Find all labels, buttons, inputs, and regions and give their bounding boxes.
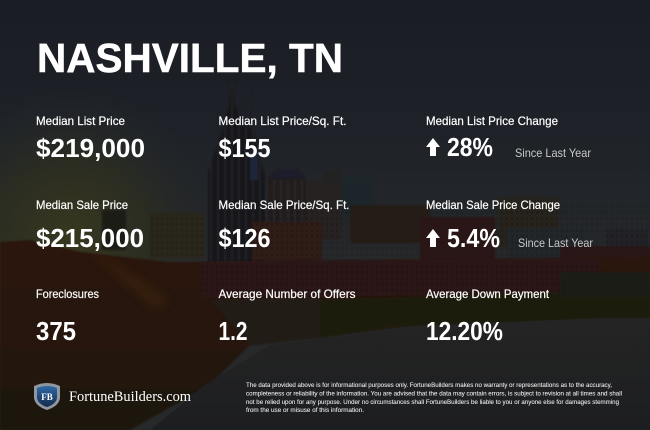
stat: median sale price per sq ft: Median Sale Price/Sq. Ft. (218, 198, 350, 212)
stat: median sale price per sq ft: $126 (218, 223, 270, 253)
disclaimer: not be relied upon for any purpose. Under no circumstances shall FortuneBuilders be liable to you or anyone else for damages stemming (246, 400, 619, 406)
disclaimer: from the use or misuse of this information. (246, 408, 364, 414)
stat: median sale price: Median Sale Price (36, 198, 128, 212)
stat: median list price per sq ft: $155 (218, 133, 270, 163)
sun flare (85, 245, 170, 310)
stat: median list price: Median List Price (36, 114, 125, 128)
icon: up arrow (426, 138, 440, 156)
disclaimer: The data provided above is for informational purposes only. FortuneBuilders makes no warranty or representations as to the accuracy, (246, 383, 612, 389)
skyline buildings (102, 77, 650, 275)
disclaimer: completeness or reliability of the information. You are advised that the data may contain errors, is subject to revision at all times and shall (246, 392, 622, 398)
stat: median list price per sq ft (218, 114, 346, 163)
stat: median list price change: Median List Price Change (426, 114, 558, 128)
stat: median sale price change: Median Sale Price Change (426, 198, 560, 212)
waterfront buildings (200, 258, 600, 298)
stat: median sale price change (426, 198, 593, 253)
stat: average down payment (426, 287, 550, 346)
stat: median list price change (426, 114, 591, 162)
stat: average down payment: 12.20% (426, 316, 503, 346)
stat: average number of offers: 1.2 (218, 316, 248, 346)
stat: median list price: $219,000 (36, 133, 145, 163)
stat: median list price (36, 114, 145, 163)
logo: FortuneBuilders: FortuneBuilders.com (69, 389, 191, 405)
stat: average number of offers (218, 287, 356, 346)
icon: up arrow (426, 229, 440, 247)
icon: shield (34, 383, 60, 410)
icon: shield: FB (41, 392, 53, 402)
stat: median sale price change: Since Last Year (518, 236, 593, 250)
stat: median sale price per sq ft (218, 198, 350, 253)
stat: foreclosures (36, 287, 99, 346)
stat: median sale price (36, 198, 144, 253)
stat: median sale price change: 5.4% (447, 223, 500, 253)
city band (0, 240, 650, 430)
stat: foreclosures: Foreclosures (36, 287, 99, 301)
stat: median list price change: 28% (447, 132, 493, 162)
disclaimer (246, 383, 622, 414)
title: NASHVILLE, TN (37, 35, 343, 81)
stat: median list price change: Since Last Year (515, 146, 591, 160)
river (150, 318, 650, 430)
stat: average down payment: Average Down Payment (426, 287, 550, 301)
stat: average number of offers: Average Number of Offers (218, 287, 356, 301)
stat: foreclosures: 375 (36, 316, 76, 346)
logo: FortuneBuilders (34, 383, 191, 410)
stat: median sale price: $215,000 (36, 223, 144, 253)
stat: median list price per sq ft: Median List Price/Sq. Ft. (218, 114, 346, 128)
